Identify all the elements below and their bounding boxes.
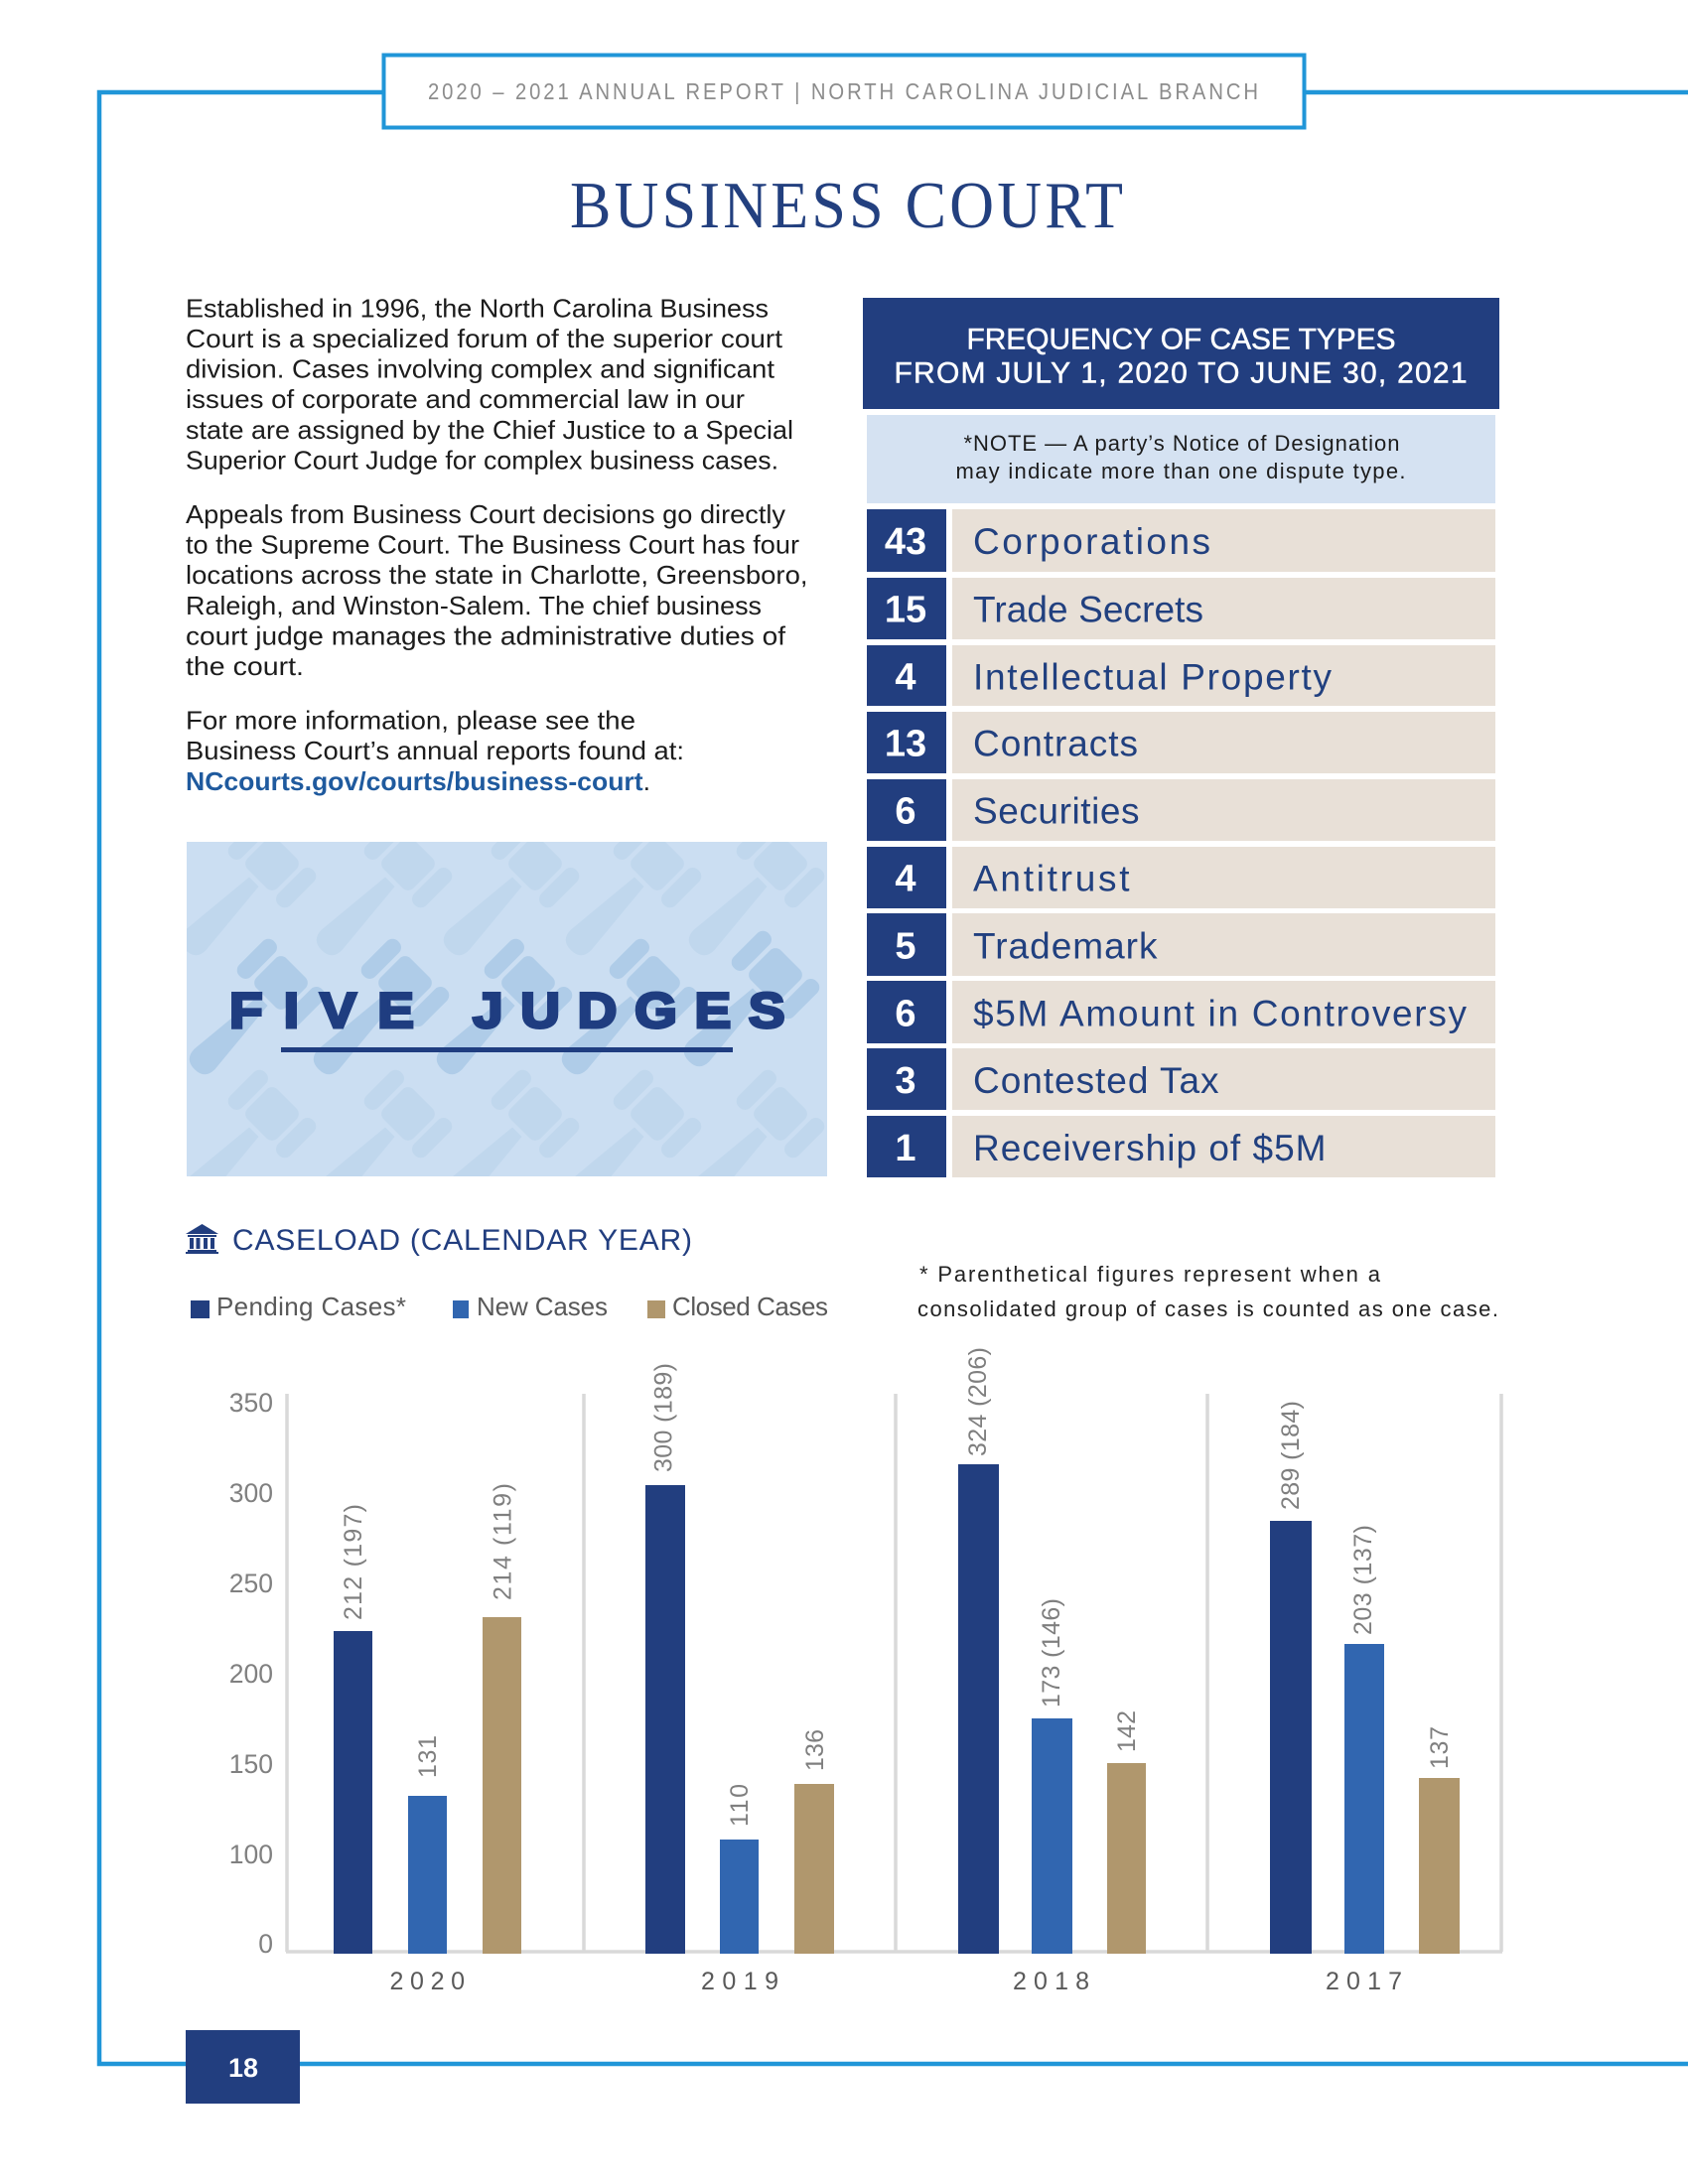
case type row: receivership: Receivership of $5M xyxy=(973,1128,1327,1168)
text block: court description xyxy=(186,293,793,475)
group 2019: 300 (189) xyxy=(649,1363,677,1472)
panel heading: frequency of case types: FROM JULY 1, 2020 TO JUNE 30, 2021 xyxy=(894,357,1468,390)
chart heading: CASELOAD (CALENDAR YEAR) xyxy=(232,1224,692,1257)
icon: courthouse xyxy=(186,1224,218,1254)
running header xyxy=(383,56,1305,127)
case type row: corporations xyxy=(867,509,1495,572)
note box: may indicate more than one dispute type. xyxy=(955,459,1406,483)
case type row: contested tax: 3 xyxy=(895,1060,916,1102)
case type row: trademark: Trademark xyxy=(973,925,1158,966)
case type row: antitrust: Antitrust xyxy=(973,858,1130,899)
text block: court description: Superior Court Judge for complex business cases. xyxy=(186,445,778,475)
text block: court description: division. Cases involving complex and significant xyxy=(186,354,775,384)
case type row: securities: 6 xyxy=(895,791,916,833)
group 2017: 137 xyxy=(1426,1726,1454,1769)
case type row: contested tax: Contested Tax xyxy=(973,1060,1219,1101)
footnote xyxy=(917,1262,1498,1321)
note box xyxy=(867,415,1495,503)
panel: five judges: FIVE xyxy=(229,983,414,1038)
title: BUSINESS COURT xyxy=(570,169,1123,241)
case type row: contracts: Contracts xyxy=(973,724,1138,764)
group 2018: 173 (146) xyxy=(1038,1598,1065,1707)
text block: more information link: For more information, please see the xyxy=(186,706,635,736)
y axis labels: 100 xyxy=(229,1840,273,1869)
bar chart: caseload xyxy=(229,1347,1502,1995)
text block: appeals and locations: Appeals from Business Court decisions go directly xyxy=(186,499,785,529)
case type row: contested tax xyxy=(867,1048,1495,1110)
text block: court description: state are assigned by the Chief Justice to a Special xyxy=(186,415,793,445)
running header: 2020 – 2021 ANNUAL REPORT | NORTH CAROLINA JUDICIAL BRANCH xyxy=(428,78,1258,104)
group 2020: 2020 xyxy=(389,1968,465,1995)
text block: appeals and locations xyxy=(186,499,808,681)
text block: appeals and locations: to the Supreme Court. The Business Court has four xyxy=(186,530,799,560)
group 2020: 214 (119) xyxy=(489,1483,516,1600)
panel: five judges xyxy=(187,842,827,1176)
group 2020 xyxy=(334,1483,521,1995)
case type row: corporations: Corporations xyxy=(973,521,1210,562)
case type row: securities: Securities xyxy=(973,791,1140,832)
footnote: consolidated group of cases is counted as one case. xyxy=(917,1297,1498,1321)
case type row: corporations: 43 xyxy=(885,521,926,563)
text block: court description: Court is a specialized forum of the superior court xyxy=(186,324,783,353)
case type row: contracts xyxy=(867,712,1495,773)
case type row: amount in controversy: $5M Amount in Controversy xyxy=(973,993,1468,1033)
case type row: trade secrets xyxy=(867,578,1495,639)
group 2017: 2017 xyxy=(1326,1968,1402,1995)
text block: more information link xyxy=(186,706,684,796)
chart legend: New Cases xyxy=(477,1292,608,1321)
y axis labels: 350 xyxy=(229,1388,273,1418)
text block: more information link: NCcourts.gov/courts/business-court . xyxy=(186,766,650,796)
group 2020: 212 (197) xyxy=(340,1504,367,1620)
text block: court description: Established in 1996, the North Carolina Business xyxy=(186,293,769,323)
note box: *NOTE — A party’s Notice of Designation xyxy=(963,431,1400,456)
case type row: securities xyxy=(867,779,1495,841)
panel: five judges: JUDGES xyxy=(473,983,785,1038)
group 2017: 203 (137) xyxy=(1349,1525,1377,1635)
group 2017 xyxy=(1270,1401,1460,1995)
group 2019 xyxy=(645,1363,834,1995)
text block: appeals and locations: the court. xyxy=(186,651,304,681)
text block: appeals and locations: locations across the state in Charlotte, Greensboro, xyxy=(186,560,808,590)
case type row: trade secrets: Trade Secrets xyxy=(973,590,1203,630)
chart legend xyxy=(191,1292,828,1321)
case type row: contracts: 13 xyxy=(885,724,926,765)
case type row: receivership: 1 xyxy=(895,1128,916,1169)
case type row: antitrust: 4 xyxy=(895,858,916,899)
group 2019: 2019 xyxy=(701,1968,778,1995)
page number xyxy=(186,2030,300,2104)
group 2020: 131 xyxy=(414,1735,442,1778)
group 2019: 110 xyxy=(726,1784,754,1827)
y axis labels xyxy=(229,1388,273,1959)
page number: 18 xyxy=(228,2053,258,2083)
y axis labels: 150 xyxy=(229,1749,273,1779)
y axis labels: 250 xyxy=(229,1569,273,1598)
case type row: receivership xyxy=(867,1116,1495,1177)
y axis labels: 200 xyxy=(229,1659,273,1689)
panel heading: frequency of case types: FREQUENCY OF CASE TYPES xyxy=(967,324,1396,356)
footnote: * Parenthetical figures represent when a xyxy=(919,1262,1381,1287)
y axis labels: 300 xyxy=(229,1478,273,1508)
text block: appeals and locations: court judge manages the administrative duties of xyxy=(186,620,786,650)
case type row: trademark: 5 xyxy=(895,925,916,967)
group 2018: 142 xyxy=(1113,1710,1141,1752)
text block: appeals and locations: Raleigh, and Winston-Salem. The chief business xyxy=(186,591,762,620)
case type row: intellectual property: 4 xyxy=(895,657,916,699)
chart legend: Pending Cases* xyxy=(216,1292,406,1321)
group 2018 xyxy=(958,1347,1146,1995)
group 2018: 324 (206) xyxy=(964,1347,992,1456)
group 2018: 2018 xyxy=(1013,1968,1089,1995)
case type row: trademark xyxy=(867,913,1495,976)
case type row: amount in controversy: 6 xyxy=(895,993,916,1034)
text block: court description: issues of corporate and commercial law in our xyxy=(186,384,745,414)
case type row: antitrust xyxy=(867,847,1495,908)
case type row: intellectual property xyxy=(867,645,1495,706)
panel heading: frequency of case types xyxy=(863,298,1499,409)
y axis labels: 0 xyxy=(258,1929,273,1959)
case type row: intellectual property: Intellectual Property xyxy=(973,657,1333,698)
case type row: amount in controversy xyxy=(867,981,1495,1043)
text block: more information link: Business Court’s annual reports found at: xyxy=(186,736,684,765)
group 2017: 289 (184) xyxy=(1277,1401,1305,1510)
chart legend: Closed Cases xyxy=(672,1292,828,1321)
case type row: trade secrets: 15 xyxy=(885,590,926,631)
group 2019: 136 xyxy=(801,1729,829,1771)
